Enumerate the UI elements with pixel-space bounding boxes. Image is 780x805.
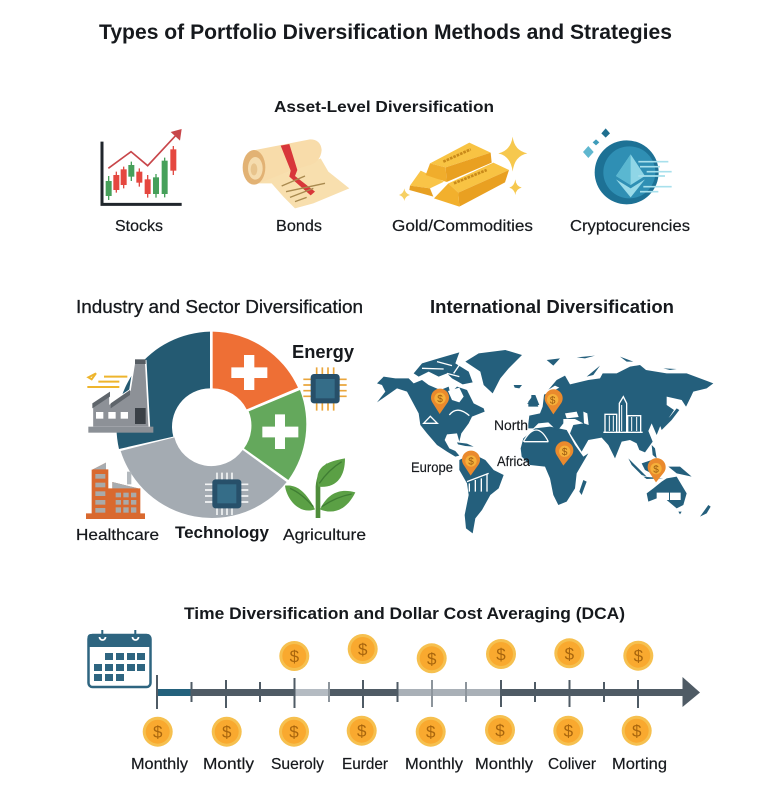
label: stocks: Stocks: [115, 218, 163, 235]
south america: [459, 453, 504, 533]
iceland: [514, 385, 522, 388]
heading: asset-level diversification: Asset-Level Diversification: [274, 99, 494, 116]
icon: plant: [285, 458, 355, 518]
white map illustrations: [424, 410, 489, 492]
coins: bottom row: $: [289, 723, 299, 742]
label: cryptocurrencies: Cryptocurencies: [570, 218, 690, 235]
coins: top row: $: [427, 649, 437, 668]
timeline labels: Montly: [203, 756, 254, 773]
coins: top row: [279, 634, 653, 673]
coins: top row: $: [496, 645, 506, 664]
coins: bottom row: [143, 715, 652, 747]
arctic islands: [414, 352, 473, 384]
label: technology: Technology: [175, 523, 270, 542]
heading: time diversification and DCA: Time Diversification and Dollar Cost Averaging (DCA): [184, 604, 625, 623]
coins: bottom row: $: [222, 723, 232, 742]
icon: cryptocurrency coin: [583, 128, 672, 204]
timeline labels: Monthly: [475, 756, 533, 773]
icon: chip on gray: [205, 473, 248, 515]
timeline arrow: [157, 675, 700, 709]
pin: north america: $: [437, 394, 443, 405]
label: gold/commodities: Gold/Commodities: [392, 218, 533, 235]
timeline labels: Coliver: [548, 756, 597, 773]
caribbean islands: [457, 442, 474, 447]
coins: top row: $: [565, 644, 575, 663]
pin: europe: [545, 389, 563, 414]
coins: bottom row: $: [357, 722, 367, 741]
title: Types of Portfolio Diversification Methods and Strategies: [99, 21, 672, 44]
coins: top row: $: [358, 640, 368, 659]
label: energy: Energy: [292, 342, 354, 362]
icon: factory: [87, 359, 153, 433]
inland seas: [544, 386, 589, 425]
icon: bonds scroll: [243, 139, 349, 208]
coins: bottom row: $: [564, 722, 574, 741]
chart: world map, americas: [377, 350, 539, 533]
donut segment: orange: [213, 332, 298, 409]
coins: bottom row: $: [495, 721, 505, 740]
coins: bottom row: $: [632, 722, 642, 741]
label: healthcare: Healthcare: [76, 527, 159, 544]
timeline labels: Monthly: [131, 756, 188, 773]
heading: industry and sector diversification: Industry and Sector Diversification: [76, 297, 363, 317]
donut segment: gray: [121, 437, 287, 518]
coins: top row: $: [634, 647, 644, 666]
pin: oceania: $: [653, 464, 659, 475]
eurasia: [528, 365, 713, 458]
timeline labels: Monthly: [405, 756, 463, 773]
icon: chip top right: [303, 367, 347, 411]
timeline labels: Morting: [612, 756, 667, 773]
pin: africa: $: [562, 447, 568, 458]
icon: stocks candlestick chart: [102, 129, 182, 204]
icon: plus on orange: [231, 355, 267, 390]
icon: plus on green: [262, 414, 298, 449]
donut segment: navy: [117, 332, 210, 449]
timeline labels: [131, 756, 667, 773]
pin: oceania: [648, 458, 666, 482]
pin: europe: $: [550, 395, 556, 406]
pin: north america: [431, 389, 449, 414]
islands: [528, 356, 711, 517]
pin: south america: $: [468, 457, 474, 468]
icon: gold bars: [399, 137, 527, 207]
hudson bay: [448, 388, 464, 402]
pin: africa: [555, 441, 573, 466]
icon: healthcare building: [86, 463, 145, 519]
donut segment: green: [244, 390, 306, 480]
map label: africa: Africa: [497, 453, 530, 469]
pin: south america: [462, 451, 480, 476]
map label: europe: Europe: [411, 459, 453, 475]
greenland: [465, 350, 522, 393]
icon: calendar: [88, 630, 151, 687]
timeline labels: Sueroly: [271, 756, 324, 773]
label: bonds: Bonds: [276, 218, 322, 235]
label: agriculture: Agriculture: [283, 527, 366, 544]
australia: [647, 477, 687, 508]
map label: north: North: [494, 417, 528, 433]
timeline labels: Eurder: [342, 756, 389, 773]
north america: [377, 377, 485, 457]
africa: [521, 427, 588, 505]
chart: world map, old world: [521, 356, 713, 517]
coins: top row: $: [290, 647, 300, 666]
britain: [527, 395, 539, 406]
heading: international diversification: International Diversification: [430, 297, 674, 317]
coins: bottom row: $: [153, 723, 163, 742]
white map illustrations: [523, 397, 680, 500]
coins: bottom row: $: [426, 723, 436, 742]
chart: sector donut: [117, 332, 355, 518]
